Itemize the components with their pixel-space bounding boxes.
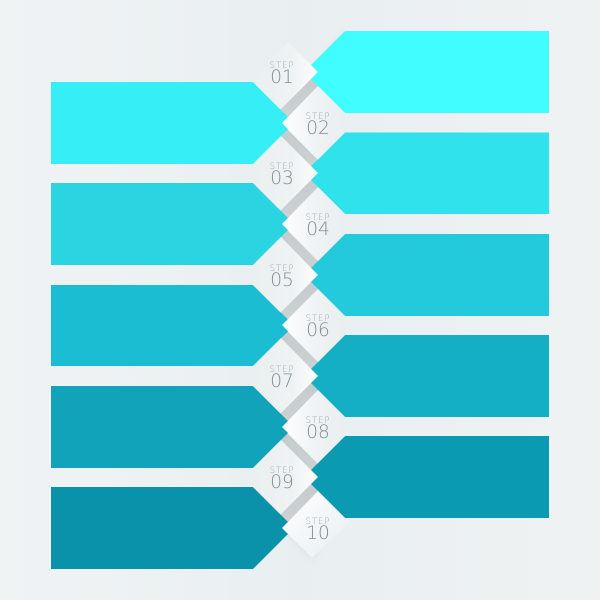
left bar 4	[51, 386, 294, 468]
step 4: 04	[306, 219, 330, 240]
left bar 1	[51, 82, 294, 164]
left bar 5	[51, 487, 294, 569]
step 3: STEP	[270, 162, 294, 172]
left bar 3	[51, 285, 294, 366]
step 3: 03	[270, 168, 294, 189]
step 8	[282, 390, 345, 463]
step 7: STEP	[270, 365, 294, 375]
step 5: STEP	[270, 264, 294, 274]
step 2: 02	[306, 118, 330, 139]
step 10: STEP	[306, 517, 330, 527]
step 6: STEP	[306, 314, 330, 324]
soft shadows behind arrows	[282, 31, 345, 560]
step 7	[253, 338, 318, 414]
step 2	[282, 86, 345, 160]
step 6	[282, 289, 345, 362]
step 9	[253, 440, 318, 514]
right bar 4	[304, 335, 549, 417]
step 5	[253, 237, 318, 312]
step 3	[253, 136, 318, 210]
step 1: STEP	[270, 61, 294, 71]
right bar 2	[304, 132, 549, 214]
step 9: 09	[270, 472, 294, 493]
step 1: 01	[270, 67, 294, 88]
step 8: 08	[306, 422, 330, 443]
step 7: 07	[270, 371, 294, 392]
step 6: 06	[306, 320, 330, 341]
step 10: 10	[306, 523, 330, 544]
step 9: STEP	[270, 466, 294, 476]
right bar 1	[304, 31, 549, 113]
step 4	[282, 187, 345, 261]
step 8: STEP	[306, 416, 330, 426]
weave stripes	[278, 72, 330, 532]
step 4: STEP	[306, 213, 330, 223]
left bar 2	[51, 183, 294, 265]
step 2: STEP	[306, 112, 330, 122]
step 5: 05	[270, 270, 294, 291]
right bar 5	[304, 436, 549, 518]
step 10	[282, 491, 350, 558]
step 1	[253, 42, 318, 110]
right bar 3	[304, 234, 549, 316]
